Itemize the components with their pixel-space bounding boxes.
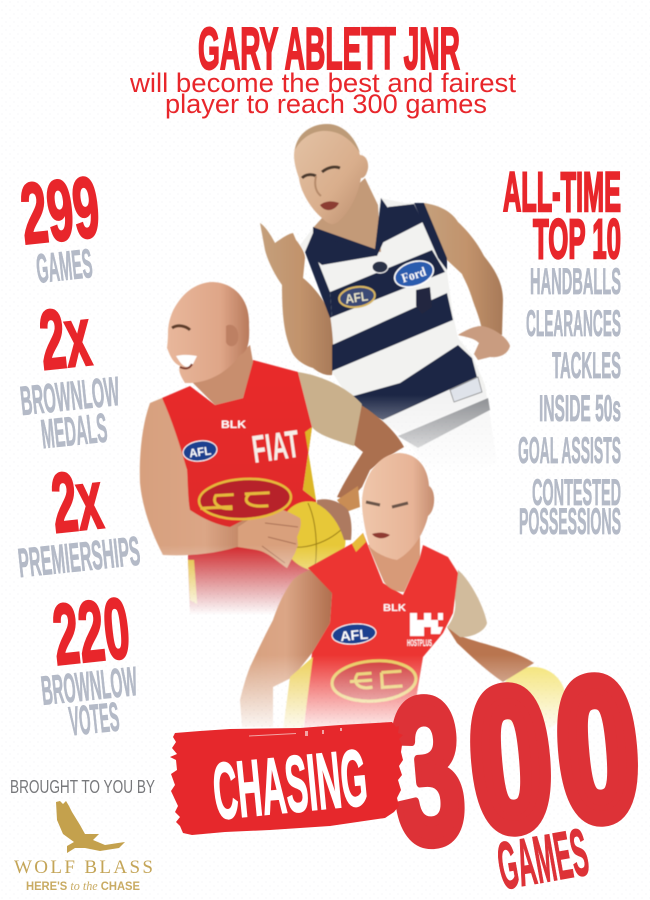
big number 300: [383, 637, 647, 889]
title: [129, 16, 517, 119]
yellow side panel: [303, 427, 316, 500]
badge word: AFL: [339, 626, 369, 644]
logo: AFL: [331, 622, 377, 646]
jersey body: [300, 198, 486, 425]
left stats column: [16, 159, 142, 744]
badge word: Ford: [399, 263, 429, 286]
arm: forearm behind ball: [335, 403, 404, 500]
jersey stripes: [305, 198, 477, 420]
player: Geelong guernsey: [260, 124, 510, 475]
shoulder yoke yellow: [352, 533, 366, 552]
jersey: [303, 533, 458, 735]
arm: forearm: [447, 627, 534, 682]
neck: [313, 178, 381, 252]
hand on ball: [238, 508, 301, 568]
head: [167, 282, 249, 383]
left stats column: GAMES: [34, 240, 94, 292]
hand: right: [458, 326, 510, 360]
text: BROWNLOW: [39, 658, 139, 714]
brush specks: [249, 728, 342, 736]
arm: strapping tape: [298, 372, 362, 446]
left stats column: MEDALS: [39, 405, 109, 457]
number: 220: [49, 580, 134, 684]
neck: [190, 345, 253, 405]
icon: eagle: [56, 801, 125, 853]
arm: left: [240, 570, 332, 727]
arm: right: [423, 203, 503, 335]
player: Gold Coast, running with ball: [140, 282, 404, 615]
football in hand: [500, 667, 566, 733]
stat: 2x Brownlow medals: [18, 289, 122, 457]
badge word: AFL: [344, 289, 369, 307]
badge: AFL: [338, 285, 376, 309]
number: 299: [16, 159, 104, 263]
face: eye and mouth guard: [172, 326, 190, 330]
text: PREMIERSHIPS: [16, 528, 142, 586]
wrist brace: [337, 486, 360, 512]
sponsor block: [10, 777, 155, 893]
badge oval: [338, 285, 376, 309]
number: 2x: [35, 289, 95, 387]
stat: 299 games: [16, 159, 104, 292]
yellow side panel: [283, 657, 313, 730]
brush stroke: [170, 722, 403, 835]
logo: BLK: BLK: [221, 419, 246, 431]
shorts patch: [450, 377, 482, 402]
subtitle line 2: player to reach 300 games: [165, 89, 487, 119]
head: scalp shading: [295, 124, 360, 153]
logo: FIAT: FIAT: [250, 423, 302, 472]
stat: 220 Brownlow votes: VOTES: [67, 694, 121, 744]
digit 3: 3: [383, 654, 473, 889]
subtitle line 1: will become the best and fairest: [129, 68, 517, 98]
digit 0: 0: [462, 647, 560, 872]
logo: AFL: [182, 439, 218, 463]
right column: all-time top 10: [503, 160, 621, 542]
badge word: AFL: [188, 444, 212, 460]
torso jersey: [162, 360, 320, 615]
head: [362, 453, 434, 560]
chasing banner: CHASING: [209, 733, 371, 836]
other hand: [317, 499, 352, 540]
face: eyes and mouth: [302, 167, 340, 178]
text: BROWNLOW: [18, 368, 122, 424]
brand name: WOLF BLASS: [14, 857, 153, 878]
checker mark: [410, 613, 443, 636]
number: 2x: [47, 452, 107, 550]
head: [294, 124, 368, 224]
football: [286, 500, 346, 570]
arm: left raised: [260, 223, 333, 375]
arm: shoulder and biceps: [139, 398, 248, 556]
sponsor label: BROUGHT TO YOU BY: [10, 777, 155, 797]
neck: [368, 535, 420, 592]
face: eyes and mouth: [366, 502, 408, 507]
ear: [226, 325, 238, 346]
logo: BLK: BLK: [383, 603, 407, 614]
shorts: [400, 397, 497, 475]
logo: GC: [331, 658, 417, 704]
logo: GC: [198, 477, 292, 521]
brand tagline: HERE'S to the CHASE: [26, 878, 140, 893]
badge oval: [392, 259, 435, 288]
badge oval: [331, 622, 377, 646]
badge: cats logo: [415, 286, 432, 308]
sponsor word: HOSTPLUS: [407, 638, 432, 648]
badge: club crest: [372, 261, 388, 273]
stat: 220 Brownlow votes: [39, 580, 139, 744]
chasing banner: [170, 722, 403, 836]
badge: Ford: [392, 259, 435, 288]
arm: shoulder strapping: [447, 570, 487, 637]
logo: sponsor: [407, 613, 443, 648]
badge oval: [182, 439, 218, 463]
player: Gold Coast, front: [240, 453, 566, 735]
stat: 2x premierships: [16, 452, 142, 586]
